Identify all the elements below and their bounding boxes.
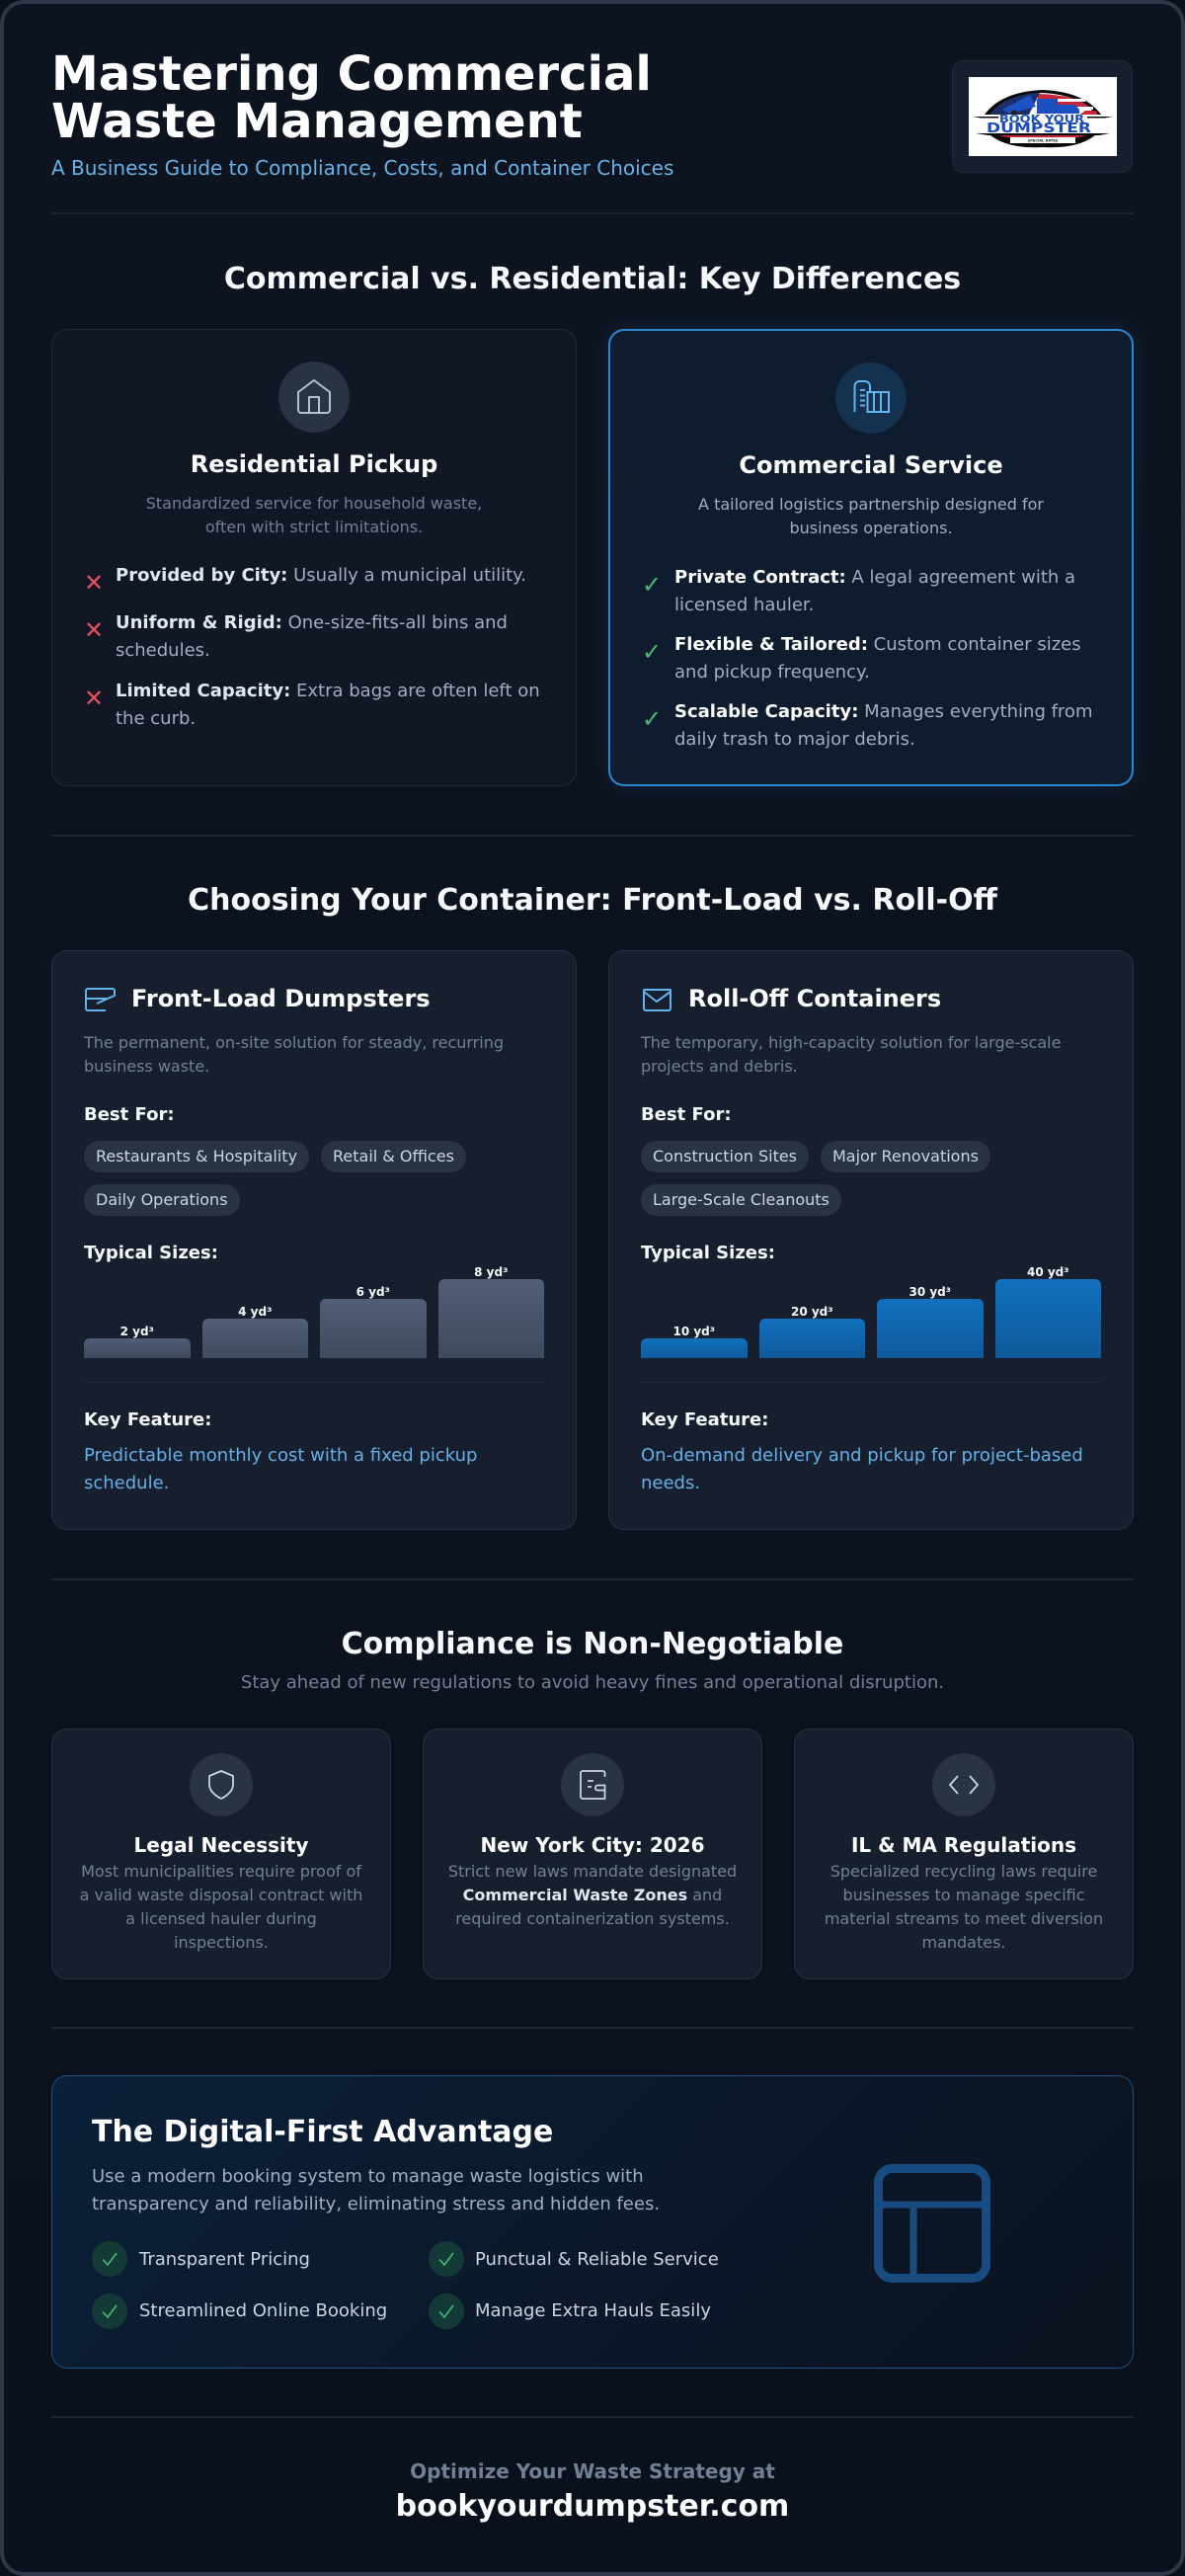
panel text: required containerization systems. xyxy=(455,1909,730,1928)
tags: best for: Construction Sites xyxy=(653,1147,797,1166)
panel: legal necessity xyxy=(51,1729,391,1979)
panel description: Standardized service for household waste, xyxy=(146,494,482,513)
panel text: mandates. xyxy=(921,1933,1006,1952)
list item: provided by city: ✕ xyxy=(84,569,104,597)
icon: buildings xyxy=(835,362,907,434)
label: typical sizes: Typical Sizes: xyxy=(84,1243,218,1263)
icon: house xyxy=(278,362,350,433)
bar chart: front-load sizes xyxy=(84,1265,544,1358)
panel description xyxy=(83,1033,504,1076)
list item: uniform and rigid: ✕ xyxy=(84,616,104,644)
icon: front-load xyxy=(85,988,116,1011)
logo panel xyxy=(952,60,1133,173)
heading: choosing your container: Choosing Your Container: Front-Load vs. Roll-Off xyxy=(188,883,997,918)
bar chart: roll-off sizes: 40 yd³ xyxy=(1027,1265,1069,1279)
tags: best for: Large-Scale Cleanouts xyxy=(653,1190,830,1209)
bar chart: roll-off sizes: 10 yd³ xyxy=(672,1325,715,1338)
panel text xyxy=(92,2166,660,2214)
benefit: streamlined booking xyxy=(92,2294,387,2329)
benefit: punctual and reliable: Punctual & Reliable Service xyxy=(475,2248,719,2270)
logo wordmark xyxy=(987,114,1092,136)
panel description xyxy=(698,495,1044,537)
panel: new york city 2026 xyxy=(423,1729,762,1979)
title: Waste Management xyxy=(51,94,583,149)
panel title: IL & MA Regulations xyxy=(851,1833,1076,1857)
panel description xyxy=(640,1033,1061,1076)
list item: private contract xyxy=(642,567,1075,615)
benefit: transparent pricing xyxy=(92,2241,310,2277)
panel text: transparency and reliability, eliminating stress and hidden fees. xyxy=(92,2194,660,2214)
panel: digital-first advantage xyxy=(51,2075,1134,2369)
panel description: projects and debris. xyxy=(641,1057,798,1076)
panel title: New York City: 2026 xyxy=(480,1833,705,1857)
icon: document xyxy=(561,1753,624,1816)
panel title: Roll-Off Containers xyxy=(688,985,941,1012)
panel description: A tailored logistics partnership designed for xyxy=(698,495,1044,514)
tags: best for: Daily Operations xyxy=(96,1190,228,1209)
list item: private contract: licensed hauler. xyxy=(674,595,814,615)
subtitle: A Business Guide to Compliance, Costs, and Container Choices xyxy=(51,156,673,180)
tags: best for: Retail & Offices xyxy=(333,1147,454,1166)
panel text xyxy=(80,1862,362,1952)
panel text: Specialized recycling laws require xyxy=(830,1862,1097,1881)
panel title: The Digital-First Advantage xyxy=(92,2115,553,2149)
label: best for: Best For: xyxy=(641,1104,732,1125)
key feature text xyxy=(641,1444,1083,1493)
panel text: a valid waste disposal contract with xyxy=(80,1886,362,1904)
panel text xyxy=(825,1862,1103,1952)
list item: provided by city: Provided by City: Usually a municipal utility. xyxy=(116,565,526,586)
bar chart: front-load sizes: 4 yd³ xyxy=(238,1305,272,1319)
tags: best for: Major Renovations xyxy=(832,1147,979,1166)
key feature text: Predictable monthly cost with a fixed pickup xyxy=(84,1444,477,1466)
bar chart: front-load sizes: 8 yd³ xyxy=(474,1265,508,1279)
panel text: Use a modern booking system to manage waste logistics with xyxy=(92,2166,644,2187)
benefit: transparent pricing: Transparent Pricing xyxy=(139,2248,310,2270)
list item: uniform and rigid: schedules. xyxy=(116,640,210,661)
benefit: extra hauls xyxy=(429,2294,711,2329)
logo wordmark: DUMPSTER xyxy=(987,121,1092,136)
panel: commercial service xyxy=(608,329,1134,786)
list item: flexible and tailored: Flexible & Tailored: Custom container sizes xyxy=(674,634,1081,655)
panel text: Most municipalities require proof of xyxy=(81,1862,361,1881)
benefit: extra hauls: Manage Extra Hauls Easily xyxy=(475,2300,711,2321)
list item: uniform and rigid: Uniform & Rigid: One-size-fits-all bins and xyxy=(116,612,508,633)
panel title: Front-Load Dumpsters xyxy=(131,985,431,1012)
footer xyxy=(396,2459,789,2524)
panel text xyxy=(448,1862,737,1928)
heading: commercial vs residential: Commercial vs. Residential: Key Differences xyxy=(224,262,961,296)
key feature text: On-demand delivery and pickup for project-based xyxy=(641,1444,1083,1466)
label: key feature: Key Feature: xyxy=(641,1409,768,1430)
list item: flexible and tailored: ✓ xyxy=(642,638,662,666)
heading: compliance: Compliance is Non-Negotiable xyxy=(342,1627,843,1661)
icon: code brackets xyxy=(932,1753,995,1816)
list item: scalable capacity: Scalable Capacity: Manages everything from xyxy=(674,701,1092,722)
panel text: material streams to meet diversion xyxy=(825,1909,1103,1928)
panel description: The temporary, high-capacity solution for large-scale xyxy=(641,1033,1061,1052)
compliance subtitle: Stay ahead of new regulations to avoid heavy fines and operational disruption. xyxy=(241,1672,944,1693)
logo wordmark: BOOK YOUR xyxy=(999,114,1084,125)
tags: best for xyxy=(641,1141,990,1216)
tags: best for xyxy=(84,1141,466,1216)
list item: scalable capacity: ✓ xyxy=(642,705,662,733)
bar chart: roll-off sizes: 30 yd³ xyxy=(908,1285,951,1299)
panel title: Legal Necessity xyxy=(134,1833,308,1857)
panel description: business waste. xyxy=(84,1057,209,1076)
panel: residential pickup xyxy=(51,329,577,786)
panel description: business operations. xyxy=(789,519,953,537)
list item: uniform and rigid xyxy=(84,612,508,661)
panel text: Commercial Waste Zones and xyxy=(463,1886,722,1904)
bar chart: front-load sizes: 6 yd³ xyxy=(356,1285,390,1299)
panel text: a licensed hauler during xyxy=(125,1909,317,1928)
list item: scalable capacity: daily trash to major debris. xyxy=(674,729,915,750)
logo: Book Your Dumpster: SPECIAL RATES xyxy=(1028,138,1059,142)
panel: il and ma regulations xyxy=(794,1729,1134,1979)
panel title: Residential Pickup xyxy=(191,450,437,478)
bar chart: roll-off sizes xyxy=(641,1265,1101,1358)
panel text: Strict new laws mandate designated xyxy=(448,1862,737,1881)
list item: limited capacity: the curb. xyxy=(116,708,196,729)
footer url: bookyourdumpster.com xyxy=(396,2489,789,2524)
key feature text xyxy=(84,1444,477,1493)
key feature text: schedule. xyxy=(84,1472,169,1493)
logo: Book Your Dumpster xyxy=(969,77,1117,156)
icon: shield xyxy=(190,1753,253,1816)
list item: flexible and tailored: and pickup frequency. xyxy=(674,662,870,683)
label: best for: Best For: xyxy=(84,1104,175,1125)
panel text: inspections. xyxy=(174,1933,269,1952)
list item: private contract: Private Contract: A legal agreement with a xyxy=(674,567,1075,588)
key feature text: needs. xyxy=(641,1472,700,1493)
list item: scalable capacity xyxy=(642,701,1092,750)
bar chart: front-load sizes: 2 yd³ xyxy=(120,1325,154,1338)
icon: layout table xyxy=(874,2164,990,2283)
list item: limited capacity: Limited Capacity: Extra bags are often left on xyxy=(116,681,540,701)
title xyxy=(51,46,652,149)
list item: limited capacity: ✕ xyxy=(84,684,104,712)
title: Mastering Commercial xyxy=(51,46,652,102)
panel title: Commercial Service xyxy=(739,451,1003,479)
panel description: The permanent, on-site solution for steady, recurring xyxy=(84,1033,504,1052)
list item: limited capacity xyxy=(84,681,540,729)
bar chart: roll-off sizes: 20 yd³ xyxy=(791,1305,833,1319)
list item: private contract: ✓ xyxy=(642,571,662,599)
label: typical sizes: Typical Sizes: xyxy=(641,1243,775,1263)
panel: front-load dumpsters xyxy=(51,950,577,1530)
benefit: punctual and reliable xyxy=(429,2241,719,2277)
list item: flexible and tailored xyxy=(642,634,1081,683)
icon: roll-off xyxy=(643,989,672,1011)
benefit: streamlined booking: Streamlined Online Booking xyxy=(139,2300,387,2321)
panel description: often with strict limitations. xyxy=(205,518,423,536)
panel description xyxy=(146,494,482,536)
panel: roll-off containers xyxy=(608,950,1134,1530)
label: key feature: Key Feature: xyxy=(84,1409,211,1430)
panel text: businesses to manage specific xyxy=(842,1886,1085,1904)
footer call to action: Optimize Your Waste Strategy at xyxy=(410,2459,775,2483)
tags: best for: Restaurants & Hospitality xyxy=(96,1147,297,1166)
list item: provided by city xyxy=(84,565,526,597)
